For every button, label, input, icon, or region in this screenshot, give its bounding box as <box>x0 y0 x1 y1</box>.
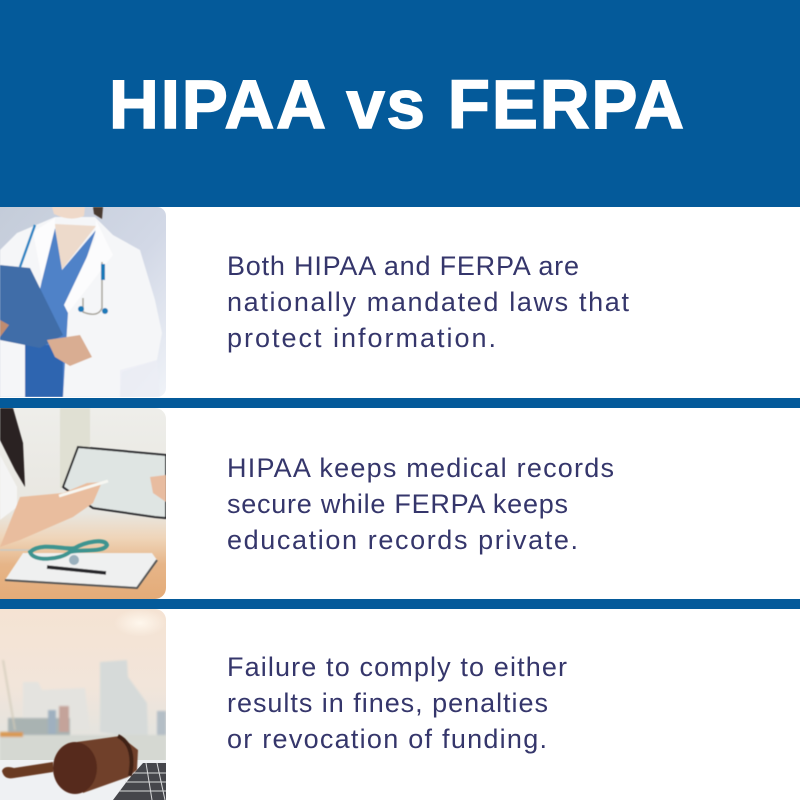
photo: tablet on desk <box>0 408 166 599</box>
divider bar 1 <box>0 398 800 408</box>
text block 2: education records private. <box>227 525 579 555</box>
text block 1: protect information. <box>227 323 497 353</box>
text block 3 <box>227 652 568 754</box>
text block 1 <box>227 251 630 353</box>
text block 1: nationally mandated laws that <box>227 287 630 317</box>
header band <box>0 0 800 207</box>
divider bar 2 <box>0 599 800 609</box>
title: HIPAA vs FERPA <box>109 66 684 143</box>
text block 1: Both HIPAA and FERPA are <box>227 251 580 281</box>
text block 3: results in fines, penalties <box>227 688 549 718</box>
text block 3: Failure to comply to either <box>227 652 568 682</box>
text block 2: HIPAA keeps medical records <box>227 453 615 483</box>
photo: gavel and city <box>0 609 166 800</box>
text block 2: secure while FERPA keeps <box>227 489 569 519</box>
photo: doctor with clipboard <box>0 207 166 397</box>
text block 2 <box>227 453 615 555</box>
text block 3: or revocation of funding. <box>227 724 548 754</box>
